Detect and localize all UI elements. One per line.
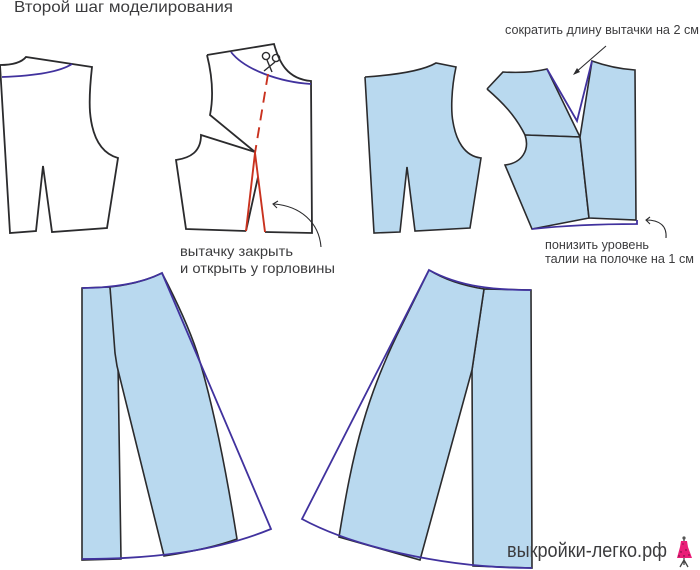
arrow: to shortened dart	[573, 46, 606, 75]
skirt pattern: left	[82, 273, 271, 560]
annotation: lower waist line 2: талии на полочке на 1 см	[545, 251, 694, 266]
arrow: to lowered waist	[646, 217, 666, 238]
pattern piece: back bodice, white	[0, 57, 118, 233]
annotation: shorten dart: сократить длину вытачки на 2 см	[505, 22, 699, 37]
icon: pink dress on mannequin	[677, 536, 692, 567]
annotation: close the dart: вытачку закрыть	[180, 243, 293, 259]
icon: scissors	[262, 52, 280, 72]
pattern piece: front bodice, modified, blue	[487, 61, 637, 229]
pattern piece: back bodice, blue	[365, 63, 481, 233]
arrow: to front dart	[273, 201, 321, 247]
watermark: site name: выкройки-легко.рф	[507, 540, 667, 562]
annotation: lower waist line 1: понизить уровень	[545, 237, 649, 252]
skirt pattern: right	[302, 270, 532, 568]
annotation: open at neckline: и открыть у горловины	[180, 260, 335, 276]
pattern piece: front bodice with dart transfer	[176, 44, 312, 233]
